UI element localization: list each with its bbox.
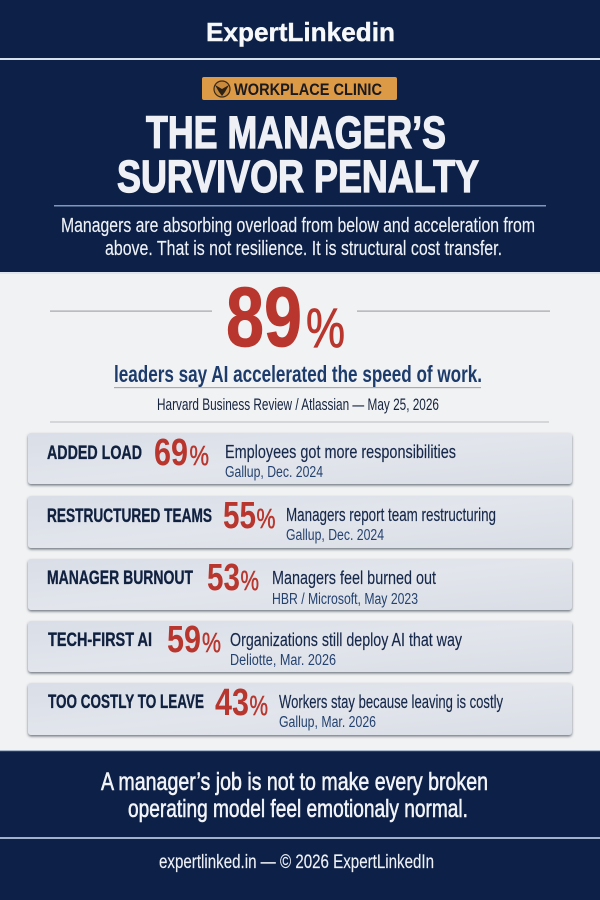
header panel	[0, 0, 600, 274]
card: manager burnout: HBR / Microsoft, May 2023	[272, 591, 418, 608]
card: tech-first AI: 59	[167, 619, 201, 661]
card: too costly to leave: 43	[215, 682, 249, 724]
hero rule	[50, 422, 549, 423]
card: tech-first AI: TECH-FIRST AI	[48, 629, 152, 651]
closing quote: operating model feel emotionaly normal.	[128, 795, 468, 823]
card: tech-first AI: Organizations still deploy AI that way	[230, 630, 462, 650]
card: restructured teams: %	[256, 503, 276, 534]
title rule	[54, 205, 546, 206]
card: too costly to leave: Gallup, Mar. 2026	[279, 714, 376, 731]
brand logo: ExpertLinkedin	[206, 17, 395, 47]
card: restructured teams: 55	[223, 495, 256, 537]
card: restructured teams: RESTRUCTURED TEAMS	[47, 505, 212, 527]
card: too costly to leave	[28, 682, 572, 735]
card: too costly to leave: TOO COSTLY TO LEAVE	[48, 691, 204, 713]
card: restructured teams: Gallup, Dec. 2024	[286, 527, 384, 544]
card: manager burnout: MANAGER BURNOUT	[47, 567, 193, 589]
hero number: 89	[226, 270, 302, 364]
footer divider	[0, 837, 600, 839]
badge: workplace clinic	[202, 77, 397, 100]
closing quote: A manager’s job is not to make every broken	[101, 768, 488, 796]
icon: clinic emblem	[214, 81, 230, 97]
hero percent: %	[306, 296, 345, 359]
card: manager burnout: %	[240, 565, 259, 596]
card: too costly to leave: %	[250, 690, 268, 721]
card: too costly to leave: Workers stay because leaving is costly	[279, 692, 503, 712]
card: added load: %	[190, 440, 209, 471]
hero caption: leaders say AI accelerated the speed of work.	[114, 361, 482, 387]
card: restructured teams: Managers report team restructuring	[286, 505, 496, 525]
card: manager burnout	[28, 557, 572, 610]
card: added load: Employees got more responsibilities	[225, 442, 456, 462]
card: restructured teams	[28, 495, 572, 548]
hero source: Harvard Business Review / Atlassian — May 25, 2026	[157, 396, 439, 414]
header divider	[0, 58, 600, 60]
hero stat: 89%	[50, 270, 550, 364]
title: SURVIVOR PENALTY	[117, 151, 479, 202]
title: THE MANAGER’S	[146, 107, 446, 158]
title	[117, 107, 479, 202]
card: tech-first AI: %	[202, 627, 221, 658]
card: added load: Gallup, Dec. 2024	[225, 464, 323, 481]
card: added load: ADDED LOAD	[47, 442, 142, 464]
closing quote	[101, 768, 488, 823]
card: added load	[28, 432, 572, 484]
card: tech-first AI	[28, 619, 572, 672]
card: manager burnout: Managers feel burned out	[272, 568, 436, 588]
card: manager burnout: 53	[207, 557, 240, 599]
subtitle	[61, 214, 535, 260]
card: tech-first AI: Deliotte, Mar. 2026	[230, 652, 336, 669]
badge label: WORKPLACE CLINIC	[234, 81, 382, 99]
card: added load: 69	[154, 432, 188, 474]
footer panel	[0, 750, 600, 900]
footer credit: expertlinked.in — © 2026 ExpertLinkedIn	[159, 852, 434, 873]
